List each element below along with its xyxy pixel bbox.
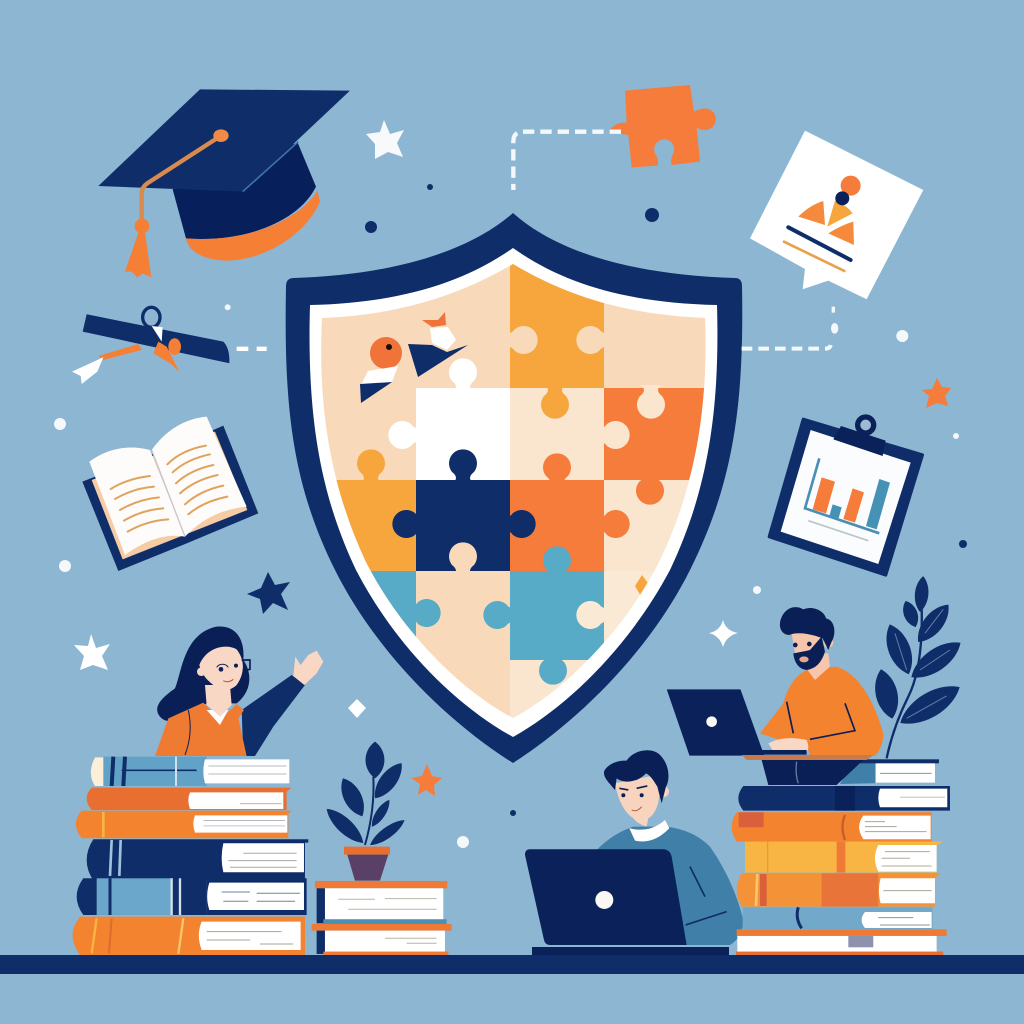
woman waving bbox=[155, 627, 323, 756]
desk bar bbox=[0, 947, 1024, 974]
right plant bbox=[870, 575, 967, 758]
right book stack bbox=[732, 759, 950, 955]
speech card with figure bbox=[750, 131, 923, 299]
upper man with laptop bbox=[668, 607, 883, 785]
graduation cap bbox=[98, 89, 350, 277]
rolled diploma bbox=[72, 304, 267, 384]
open book bbox=[82, 417, 258, 571]
clipboard with bar chart bbox=[769, 417, 922, 575]
puzzle pieces bbox=[320, 250, 714, 721]
small figures inside shield bbox=[360, 312, 468, 403]
left book stack bbox=[72, 757, 308, 955]
decorative stars and dots bbox=[54, 120, 967, 848]
plant leaves bbox=[322, 742, 408, 850]
dashed connector right bbox=[742, 307, 908, 349]
potted plant on short stack bbox=[312, 742, 452, 955]
top puzzle piece bbox=[609, 85, 716, 167]
dashed connector top bbox=[513, 132, 621, 190]
shield bbox=[286, 213, 742, 763]
lower man with laptop bbox=[525, 750, 743, 955]
